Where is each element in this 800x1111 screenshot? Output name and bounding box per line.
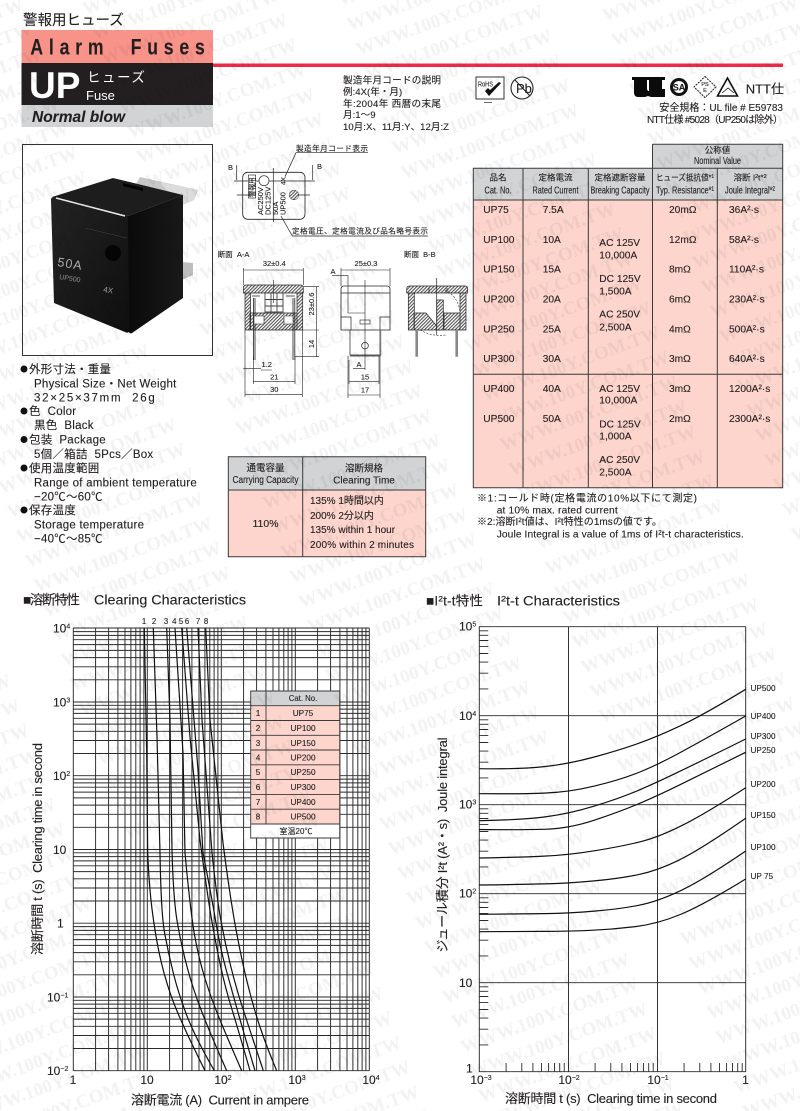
date code notes: 10月:X、11月:Y、12月:Z [343,122,449,133]
y axis tick labels: 10 [53,622,66,636]
x axis tick labels: 10 [558,1073,572,1087]
icon: PSE diamond: E [703,88,707,94]
catalog numbers: UP150 [483,265,515,276]
icon: RoHS mark: RoHS [478,80,493,88]
breaking capacity: 1,500A [599,286,632,297]
y axis tick labels: 2 [472,888,476,896]
heading: I2t-t characteristics: I²t-t Characteristics [497,594,620,608]
clearing time values: 200% within 2 minutes [310,540,414,551]
date code notes: 例:4X(年・月) [343,86,402,98]
icon: PSE diamond [694,76,716,98]
header: carrying capacity: Carrying Capacity [232,475,298,486]
title band: Alarm Fuses [22,30,213,63]
side view drawing: A [356,360,362,369]
legend table: 3 [256,739,261,748]
y axis tick labels: 5 [472,622,476,628]
specification list: Range of ambient temperature [34,478,197,490]
catalog numbers [483,205,515,425]
top view drawing: DC125V [264,187,272,215]
section A-A drawing: 30 [270,385,278,394]
table footnotes: ※2:溶断I²t値は、I²t特性の1msの値です。 [477,515,662,528]
printed marking 4X: 4X [103,285,114,296]
table header: 定格電流 [538,172,573,182]
callout: date code: 製造年月コード表示 [296,143,368,153]
header: carrying capacity: 通電容量 [246,462,285,474]
specification list: Storage temperature [34,520,144,532]
rated current: 40A [543,384,561,395]
x axis tick labels: 2 [228,1075,232,1082]
legend table: UP100 [290,724,316,733]
side view drawing: 25±0.3 [355,259,377,268]
side view drawing: 15 [361,372,369,382]
catalog numbers: UP500 [483,414,515,425]
legend table: 5 [256,768,261,777]
specification list: 外形寸法・重量 [29,362,111,376]
y axis tick labels: −1 [60,992,68,1000]
safety standards text: 安全規格：UL file # E59783 [659,101,783,114]
rated current: 25A [543,325,561,336]
legend table: UP400 [290,798,316,807]
specification list: 5個／箱詰 5Pcs／Box [34,447,153,461]
curve labels [750,684,776,881]
y axis title: 溶断時間 t (s) Clearing time in second [30,743,45,955]
y axis tick labels: 10 [47,990,60,1004]
legend table: 1 [256,709,261,718]
side view drawing: 17 [361,386,369,394]
table header: Joule Integral*² [725,186,775,196]
specification list: 使用温度範囲 [29,461,100,475]
y axis tick labels: −2 [60,1066,68,1073]
curve labels: UP250 [750,746,776,755]
x axis tick labels: −2 [572,1075,580,1082]
date code notes: 月:1～9 [343,110,376,121]
breaking capacity: AC 250V [599,310,640,321]
table header: 公称値 [705,145,731,155]
joule curves [479,689,746,932]
callout: rating marks: 定格電圧、定格電流及び品名略号表示 [292,226,428,236]
curve labels: UP 75 [750,872,774,881]
curve numbers: 4 [172,617,177,626]
y axis tick labels: 3 [472,800,476,806]
fuse curves 1 to 8 [144,628,277,1071]
x axis tick labels [70,1073,380,1087]
heading: clearing characteristics [23,592,246,608]
icon: CSA mark: SA [673,82,686,92]
heading: clearing characteristics: ■溶断特性 [23,592,80,608]
breaking capacity: DC 125V [599,274,641,285]
chart grid [73,628,369,1071]
table header: Rated Current [532,186,579,196]
x axis tick labels: 10 [470,1073,484,1087]
safety standards text [647,101,783,126]
catalog numbers: UP75 [483,205,509,216]
joule integral: 110A²·s [729,265,764,276]
y axis tick labels: 10 [53,696,66,710]
table header: Cat. No. [484,186,512,196]
legend table: 8 [256,812,261,822]
table header: ヒューズ抵抗値*¹ [656,172,714,182]
joule integral: 500A²·s [729,325,765,336]
y axis tick labels: 10 [459,976,473,990]
callout: rating marks [281,216,428,236]
side view drawing: A [330,267,336,276]
legend table: 2 [256,724,261,733]
icon: RoHS mark [476,77,504,103]
typical resistance: 20mΩ [669,205,697,216]
legend table: UP200 [290,754,316,762]
top view drawing: UP500 [278,192,288,215]
rated current: 30A [543,354,561,365]
printed marking UP500: UP500 [59,274,81,284]
chart: clearing characteristics [30,617,380,1108]
y axis tick labels: 10 [459,620,472,634]
y axis tick labels: 10 [459,798,472,812]
curve numbers: 8 [204,617,208,626]
rated current [543,205,564,425]
specification list: 黒色 Black [34,419,94,432]
catalog numbers: UP200 [483,295,515,306]
breaking capacity: AC 250V [599,455,640,466]
y axis tick labels: 1 [466,1062,473,1076]
section B-B drawing [407,278,468,357]
clearing time values [310,494,414,551]
dimension drawings [218,143,468,398]
curve numbers: 7 [196,617,200,626]
joule integral: 1200A²·s [729,384,770,395]
side view drawing [330,259,390,398]
table header: Breaking Capacity [590,186,650,196]
table header [473,144,783,200]
section A-A drawing: 14 [307,340,316,348]
rated current: 7.5A [543,205,564,216]
typical resistance: 3mΩ [669,384,691,395]
clearing time values: 135% 1時間以内 [310,494,384,507]
legend table: Cat. No. [289,694,317,703]
table header: 定格遮断容量 [594,172,646,182]
typical resistance: 6mΩ [669,295,691,306]
product band: UP Fuse: UP [29,65,80,106]
y axis tick labels: 4 [66,624,70,630]
x axis tick labels: 10 [288,1073,302,1087]
curve labels: UP500 [750,684,776,693]
callout: date code [285,143,368,177]
clearing time table [228,457,426,557]
chart: I2t-t characteristics [435,620,776,1106]
y axis tick labels: 1 [57,916,64,930]
y axis tick labels: 3 [66,698,70,704]
table header: 品名 [489,172,507,182]
safety standards text: NTT仕様 #5028（UP250は除外） [647,113,783,126]
y axis tick labels [459,620,476,1076]
section A-A drawing: 23±0.6 [307,293,316,315]
japanese category heading: 警報用ヒューズ [23,12,124,29]
icon: PSE diamond: PS [701,82,709,88]
joule integral: 2300A²·s [729,414,770,425]
title block [22,30,213,127]
top view drawing: 警報用 [248,177,256,197]
table footnotes [477,492,744,541]
x axis tick labels: 3 [302,1075,306,1082]
section A-A drawing: 32±0.4 [263,259,286,268]
legend table: UP300 [290,783,316,792]
x axis tick labels: 10 [362,1073,376,1087]
curve numbers: 5 [179,617,184,626]
legend table: UP75 [293,709,314,718]
section A-A drawing: 1.2 [261,360,272,369]
date code notes [343,74,449,133]
clearing time values: 135% within 1 hour [310,525,396,536]
table body [473,200,783,488]
joule integral: 640A²·s [729,354,765,365]
section A-A drawing: 21 [270,372,278,382]
x axis tick labels: 10 [214,1073,228,1087]
rated current: 50A [543,414,561,425]
section B-B label: 断面 B-B [404,249,436,259]
icon: lead free [511,77,533,99]
x axis tick labels [470,1073,749,1087]
icon: lead free: Pb [516,81,532,96]
table footnotes: at 10% max. rated current [497,506,618,516]
x axis tick labels: 4 [376,1075,380,1082]
legend table: UP250 [290,768,316,777]
y axis tick labels: 4 [472,711,476,718]
catalog numbers: UP400 [483,384,515,395]
breaking capacity [599,238,641,478]
typical resistance: 2mΩ [669,414,691,425]
metal terminals [130,177,198,280]
icon: UL mark [632,77,665,97]
x axis tick labels: 1 [742,1073,749,1087]
specification list [20,362,197,546]
breaking capacity: DC 125V [599,420,641,431]
breaking capacity: 10,000A [599,396,637,407]
x axis tick labels: 10 [140,1073,154,1087]
x axis tick labels: −1 [661,1075,669,1082]
top view drawing: 4X [280,176,288,185]
breaking capacity: AC 125V [599,238,640,249]
top view drawing [228,162,322,222]
header: clearing time: Clearing Time [333,476,395,486]
top view drawing: B [317,162,322,171]
table header: 溶断 I²t*² [733,172,767,182]
joule integral: 230A²·s [729,295,765,306]
x axis title: 溶断電流 (A) Current in ampere [131,1092,309,1108]
y axis tick labels: 10 [53,769,66,783]
product band: UP Fuse: Fuse [86,88,115,103]
product band: UP Fuse [22,63,213,106]
minor ticks [479,631,742,1072]
table header: Nominal Value [694,156,741,167]
printed marking 50A: 50A [57,255,84,273]
table grid lines [473,144,783,488]
NTT label: NTT仕 [746,82,784,96]
date code notes: 年:2004年 西暦の末尾 [343,98,441,110]
legend table: 6 [256,783,261,792]
curve numbers: 3 [164,617,168,626]
main ratings table [473,144,783,488]
top view drawing: 50A [271,202,280,215]
curve labels: UP100 [750,843,776,852]
red header rule [213,64,783,67]
clearing time values: 200% 2分以内 [310,509,374,522]
curve labels: UP300 [750,732,776,741]
curve numbers: 2 [152,617,156,626]
breaking capacity: 10,000A [599,251,637,262]
specification list: 包装 Package [29,432,106,446]
date code notes: 製造年月コードの説明 [343,74,441,86]
y axis tick labels: 10 [53,843,67,857]
joule integral: 58A²·s [729,235,759,246]
specification list: −40℃～85℃ [34,534,103,546]
specification list: −20℃～60℃ [34,492,103,504]
x axis title: 溶断時間 t (s) Clearing time in second [505,1091,717,1106]
header: carrying capacity [232,462,298,486]
rated current: 20A [543,295,561,306]
typical resistance: 12mΩ [669,235,697,246]
curve numbers: 6 [185,617,189,626]
x axis tick labels: 1 [70,1073,77,1087]
legend table [251,691,340,838]
specification list: Physical Size・Net Weight [34,378,177,390]
top view drawing: AC250V [256,187,265,215]
legend table: UP150 [290,739,316,748]
subtype band: Normal blow: Normal blow [32,109,126,126]
legend table: UP500 [290,812,316,822]
specification list: 32×25×37mm 26g [34,392,155,404]
legend table: 7 [256,798,261,807]
y axis tick labels: 10 [47,1064,60,1078]
legend table: 室温20℃ [280,826,312,836]
capacity value: 110% [252,518,279,530]
y axis tick labels: 2 [66,771,70,778]
breaking capacity: 2,500A [599,467,632,478]
curve labels: UP200 [750,780,776,789]
table header: Typ. Resistance*¹ [656,186,714,196]
specification list: 保存温度 [29,503,76,517]
rated current: 10A [543,235,561,246]
typical resistance: 4mΩ [669,325,691,336]
typical resistance: 3mΩ [669,354,691,365]
section A-A drawing [243,259,319,397]
section A-A label: 断面 A-A [218,249,249,259]
y axis tick labels [47,622,70,1078]
y axis title: ジュール積分 I²t (A²・s) Joule integral [435,737,450,952]
icon: triangle mark [718,78,738,96]
breaking capacity: 2,500A [599,322,632,333]
joule integral [729,205,770,425]
catalog numbers: UP300 [483,354,515,365]
product band: UP Fuse: ヒューズ [87,70,146,85]
subtype band: Normal blow [22,105,213,127]
header: clearing time [333,462,395,486]
legend table: 4 [256,754,261,762]
header: clearing time: 溶断規格 [345,462,383,474]
joule integral: 36A²·s [729,205,759,216]
curve numbers: 1 [142,617,146,626]
y axis tick labels: 10 [459,886,472,900]
breaking capacity: AC 125V [599,384,640,395]
curve labels: UP400 [750,712,776,721]
x axis tick labels: −3 [484,1075,492,1082]
catalog numbers: UP100 [483,235,515,246]
y axis tick labels: 10 [459,709,472,723]
curve labels: UP150 [750,811,776,820]
heading: clearing characteristics: Clearing Characteristics [94,592,246,608]
rated current: 15A [543,265,561,276]
chart frame and decade grid [479,627,746,1072]
table footnotes: Joule Integral is a value of 1ms of I²t-t characteristics. [497,530,744,541]
top view drawing: B [228,163,233,172]
breaking capacity: 1,000A [599,432,632,443]
fuse body [51,178,183,333]
curve numbers [142,617,208,626]
icon: CSA mark [670,78,688,96]
x axis tick labels: 10 [647,1073,661,1087]
typical resistance [669,205,697,425]
product photo panel [22,144,212,356]
heading: I2t-t characteristics [426,594,620,608]
catalog numbers: UP250 [483,325,515,336]
typical resistance: 8mΩ [669,265,691,276]
table footnotes: ※1:コールド時(定格電流の10%以下にて測定) [477,492,697,504]
specification list: 色 Color [29,405,76,418]
heading: I2t-t characteristics: ■I²t-t特性 [426,594,483,608]
title band: Alarm Fuses: Alarm Fuses [30,36,205,60]
